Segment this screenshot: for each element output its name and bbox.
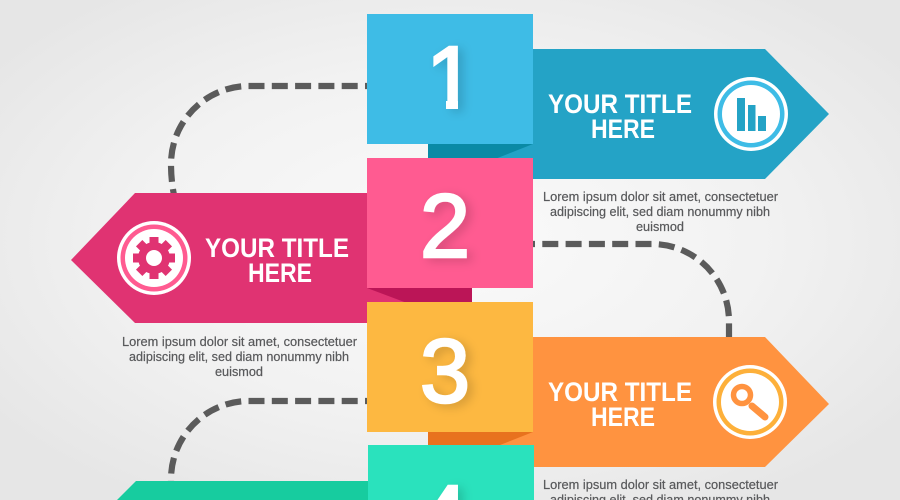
panel: step 3 number box: [367, 302, 533, 432]
text block: step 1 description: adipiscing elit, sed diam nonummy nibh: [550, 205, 770, 219]
icon: magnifier: [713, 365, 787, 439]
text block: step 3 description: [543, 478, 778, 500]
heading: step 3 title: [548, 377, 692, 432]
number 3: 3: [420, 322, 470, 422]
panel: step 4 ribbon: [117, 481, 368, 500]
number 1: 1: [426, 29, 476, 129]
text block: step 1 description: euismod: [636, 220, 684, 234]
text block: step 1 description: Lorem ipsum dolor sit amet, consectetuer: [543, 190, 778, 204]
heading: step 1 title: [548, 89, 692, 144]
text block: step 1 description: [543, 190, 778, 234]
heading: step 3 title: HERE: [591, 402, 655, 432]
dashed connector: step 2 to step 3: [533, 244, 729, 340]
heading: step 2 title: YOUR TITLE: [205, 233, 349, 263]
panel: step 4 number box: [368, 445, 534, 500]
text block: step 2 description: Lorem ipsum dolor sit amet, consectetuer: [122, 335, 357, 349]
fold: step 1: [428, 144, 533, 159]
text block: step 2 description: [122, 335, 357, 379]
heading: step 3 title: YOUR TITLE: [548, 377, 692, 407]
fold: step 3: [428, 432, 533, 447]
text block: step 2 description: adipiscing elit, sed diam nonummy nibh: [129, 350, 349, 364]
panel: step 2 number box: [367, 158, 533, 288]
heading: step 1 title: YOUR TITLE: [548, 89, 692, 119]
panel: step 1 number box: [367, 14, 533, 144]
heading: step 2 title: [205, 233, 349, 288]
number 2: 2: [420, 177, 470, 277]
heading: step 1 title: HERE: [591, 114, 655, 144]
dashed connector: step 1 to step 2: [171, 86, 367, 195]
text block: step 3 description: Lorem ipsum dolor sit amet, consectetuer: [543, 478, 778, 492]
dashed connector: step 3 to step 4: [171, 401, 367, 484]
fold: step 2: [367, 288, 472, 303]
heading: step 2 title: HERE: [248, 258, 312, 288]
icon: bar chart: [714, 77, 788, 151]
text block: step 2 description: euismod: [215, 365, 263, 379]
icon: gear: [117, 221, 191, 295]
panel: step 2 ribbon: [71, 193, 367, 323]
panel: step 1 ribbon: [533, 49, 829, 179]
panel: step 3 ribbon: [533, 337, 829, 467]
